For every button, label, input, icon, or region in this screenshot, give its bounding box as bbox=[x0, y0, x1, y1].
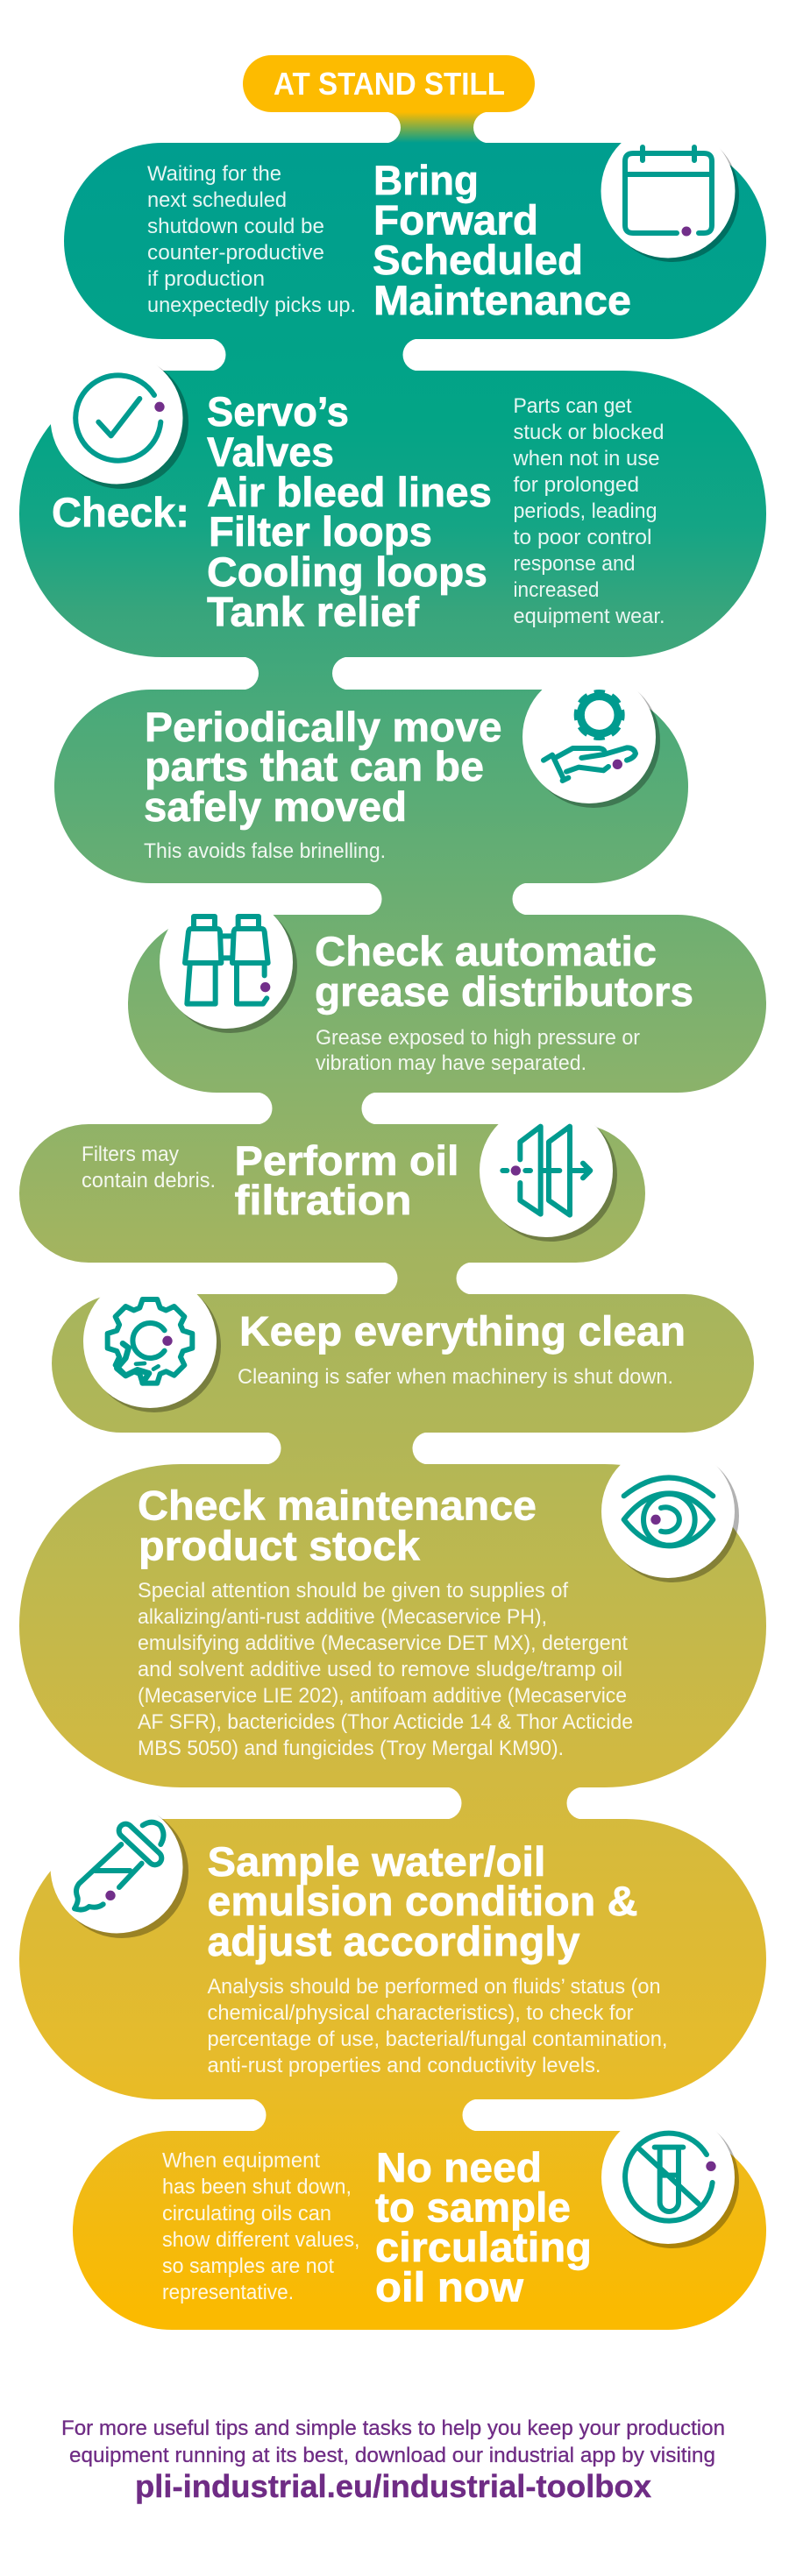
list: items to check: Air bleed lines bbox=[207, 469, 492, 515]
heading: check maintenance product stock bbox=[138, 1483, 537, 1568]
icon: dirty gear bbox=[83, 1275, 221, 1412]
body text: filters may contain debris: contain debris. bbox=[82, 1169, 216, 1192]
body text: analysis: chemical/physical characteristics), to check for bbox=[207, 2001, 634, 2025]
body text: parts can get stuck: periods, leading bbox=[514, 499, 658, 523]
body text: special attention: AF SFR), bactericides (Thor Acticide 14 & Thor Acticide bbox=[138, 1710, 633, 1734]
heading: no need to sample bbox=[375, 2144, 592, 2310]
heading: periodically move parts bbox=[144, 704, 501, 830]
body text: filters may contain debris: Filters may bbox=[82, 1143, 179, 1166]
heading: sample water/oil emulsion: emulsion condition & bbox=[207, 1878, 638, 1924]
body text: when equipment: representative. bbox=[162, 2281, 294, 2304]
connectors between panels bbox=[210, 338, 583, 2132]
icon: dropper bbox=[51, 1801, 188, 1938]
heading: no need to sample: to sample bbox=[375, 2183, 571, 2231]
body text: parts can get stuck: Parts can get bbox=[514, 394, 632, 418]
body text: special attention bbox=[138, 1579, 633, 1760]
footer link: pli-industrial.eu/industrial-toolbox bbox=[135, 2468, 651, 2504]
heading: keep everything clean: Keep everything clean bbox=[239, 1307, 686, 1355]
footer: call to action: For more useful tips and simple tasks to help you keep your production bbox=[61, 2417, 725, 2440]
body text: when equipment: so samples are not bbox=[162, 2254, 334, 2278]
heading pill: at stand still: AT STAND STILL bbox=[274, 66, 505, 102]
body text: parts can get stuck: to poor control bbox=[514, 526, 652, 549]
heading: no need to sample: No need bbox=[376, 2144, 542, 2190]
icon: calendar bbox=[601, 124, 739, 262]
panel: periodically move parts bbox=[54, 670, 688, 883]
body text: parts can get stuck bbox=[513, 394, 665, 628]
panel: bring forward scheduled maintenance bbox=[64, 124, 766, 339]
label: check: Check: bbox=[52, 489, 189, 535]
body text: waiting bbox=[147, 162, 356, 317]
heading pill: at stand still bbox=[243, 55, 535, 112]
list: items to check: Valves bbox=[207, 428, 334, 475]
body text: waiting: shutdown could be bbox=[147, 215, 324, 238]
body text: grease exposed bbox=[316, 1026, 640, 1075]
heading: periodically move parts: safely moved bbox=[144, 783, 407, 830]
panel: check list bbox=[19, 352, 766, 657]
body text: when equipment: When equipment bbox=[162, 2148, 320, 2173]
body text: waiting: next scheduled bbox=[147, 188, 287, 212]
body text: waiting: counter-productive bbox=[147, 241, 324, 265]
body text: filters may contain debris bbox=[82, 1143, 216, 1192]
body text: parts can get stuck: stuck or blocked bbox=[514, 421, 665, 444]
icon: filter bbox=[480, 1104, 617, 1242]
panel: keep everything clean bbox=[52, 1275, 754, 1433]
heading: perform oil filtration bbox=[235, 1137, 459, 1223]
body text: when equipment: show different values, bbox=[162, 2228, 359, 2252]
body text: cleaning is safer: Cleaning is safer when machinery is shut down. bbox=[238, 1365, 673, 1389]
body text: false brinelling: This avoids false brinelling. bbox=[144, 839, 386, 863]
list: items to check: Cooling loops bbox=[207, 548, 487, 595]
body text: grease exposed: vibration may have separated. bbox=[316, 1051, 586, 1075]
body text: parts can get stuck: response and bbox=[514, 552, 635, 576]
body text: analysis: percentage of use, bacterial/fungal contamination, bbox=[207, 2028, 668, 2051]
body text: when equipment: circulating oils can bbox=[162, 2202, 331, 2226]
icon: check mark bbox=[51, 352, 188, 489]
heading: bring forward scheduled maintenance: Maintenance bbox=[373, 277, 631, 323]
body text: waiting: unexpectedly picks up. bbox=[147, 294, 356, 317]
body text: analysis bbox=[207, 1975, 668, 2077]
body text: special attention: (Mecaservice LIE 202), antifoam additive (Mecaservice bbox=[138, 1684, 627, 1708]
heading: bring forward scheduled maintenance: Scheduled bbox=[373, 237, 583, 283]
body text: analysis: Analysis should be performed on fluids’ status (on bbox=[207, 1975, 661, 1999]
list: items to check: Servo’s bbox=[207, 388, 349, 435]
panel: sample water/oil emulsion bbox=[19, 1801, 766, 2099]
heading: check automatic grease distributors: Check automatic bbox=[315, 928, 657, 974]
footer: call to action bbox=[61, 2417, 725, 2504]
heading: perform oil filtration: filtration bbox=[235, 1177, 412, 1223]
heading: bring forward scheduled maintenance: Bring bbox=[373, 157, 479, 203]
list: items to check: Tank relief bbox=[207, 589, 419, 634]
icon: eye bbox=[601, 1445, 739, 1582]
heading: check automatic grease distributors: grease distributors bbox=[315, 968, 693, 1015]
body text: when equipment bbox=[162, 2148, 359, 2304]
body text: grease exposed: Grease exposed to high pressure or bbox=[316, 1026, 640, 1050]
heading: bring forward scheduled maintenance: Forward bbox=[373, 196, 538, 244]
body text: special attention: emulsifying additive (Mecaservice DET MX), detergent bbox=[138, 1631, 628, 1655]
body text: when equipment: has been shut down, bbox=[162, 2175, 352, 2199]
icon: binoculars bbox=[160, 895, 297, 1033]
icon: no test tube bbox=[601, 2111, 739, 2248]
heading: check maintenance product stock: product stock bbox=[139, 1523, 421, 1568]
heading: check maintenance product stock: Check maintenance bbox=[138, 1483, 537, 1528]
heading: bring forward scheduled maintenance bbox=[373, 157, 631, 323]
heading: check automatic grease distributors bbox=[315, 928, 693, 1015]
body text: special attention: and solvent additive used to remove sludge/tramp oil bbox=[138, 1658, 622, 1681]
body text: waiting: if production bbox=[147, 267, 265, 291]
list: items to check: Filter loops bbox=[209, 508, 432, 555]
panel: no need to sample circulating oil bbox=[73, 2111, 766, 2330]
body text: parts can get stuck: increased bbox=[514, 578, 600, 602]
body text: waiting: Waiting for the bbox=[147, 162, 281, 186]
icon: hand holding gear bbox=[522, 670, 660, 808]
body text: special attention: Special attention should be given to supplies of bbox=[138, 1579, 568, 1603]
footer: call to action: equipment running at its best, download our industrial app by visiting bbox=[69, 2444, 715, 2467]
body text: analysis: anti-rust properties and conductivity levels. bbox=[207, 2054, 601, 2077]
heading: sample water/oil emulsion: Sample water/oil bbox=[207, 1838, 545, 1885]
body text: special attention: MBS 5050) and fungicides (Troy Mergal KM90). bbox=[138, 1737, 564, 1760]
panel: check automatic grease distributors bbox=[128, 895, 766, 1093]
body text: special attention: alkalizing/anti-rust additive (Mecaservice PH), bbox=[138, 1605, 547, 1629]
heading: sample water/oil emulsion bbox=[207, 1838, 638, 1964]
list: items to check bbox=[207, 388, 492, 634]
body text: parts can get stuck: for prolonged bbox=[514, 473, 639, 497]
heading: periodically move parts: parts that can be bbox=[145, 743, 484, 789]
heading: no need to sample: oil now bbox=[375, 2264, 523, 2310]
body text: parts can get stuck: when not in use bbox=[513, 447, 659, 471]
connector: pill to first panel bbox=[385, 112, 489, 144]
heading: perform oil filtration: Perform oil bbox=[235, 1137, 459, 1184]
body text: parts can get stuck: equipment wear. bbox=[514, 605, 665, 628]
heading: sample water/oil emulsion: adjust accordingly bbox=[207, 1918, 580, 1964]
heading: no need to sample: circulating bbox=[375, 2224, 592, 2270]
panel: check maintenance product stock bbox=[19, 1445, 766, 1787]
panel: perform oil filtration bbox=[19, 1104, 645, 1263]
heading: periodically move parts: Periodically move bbox=[145, 704, 501, 750]
